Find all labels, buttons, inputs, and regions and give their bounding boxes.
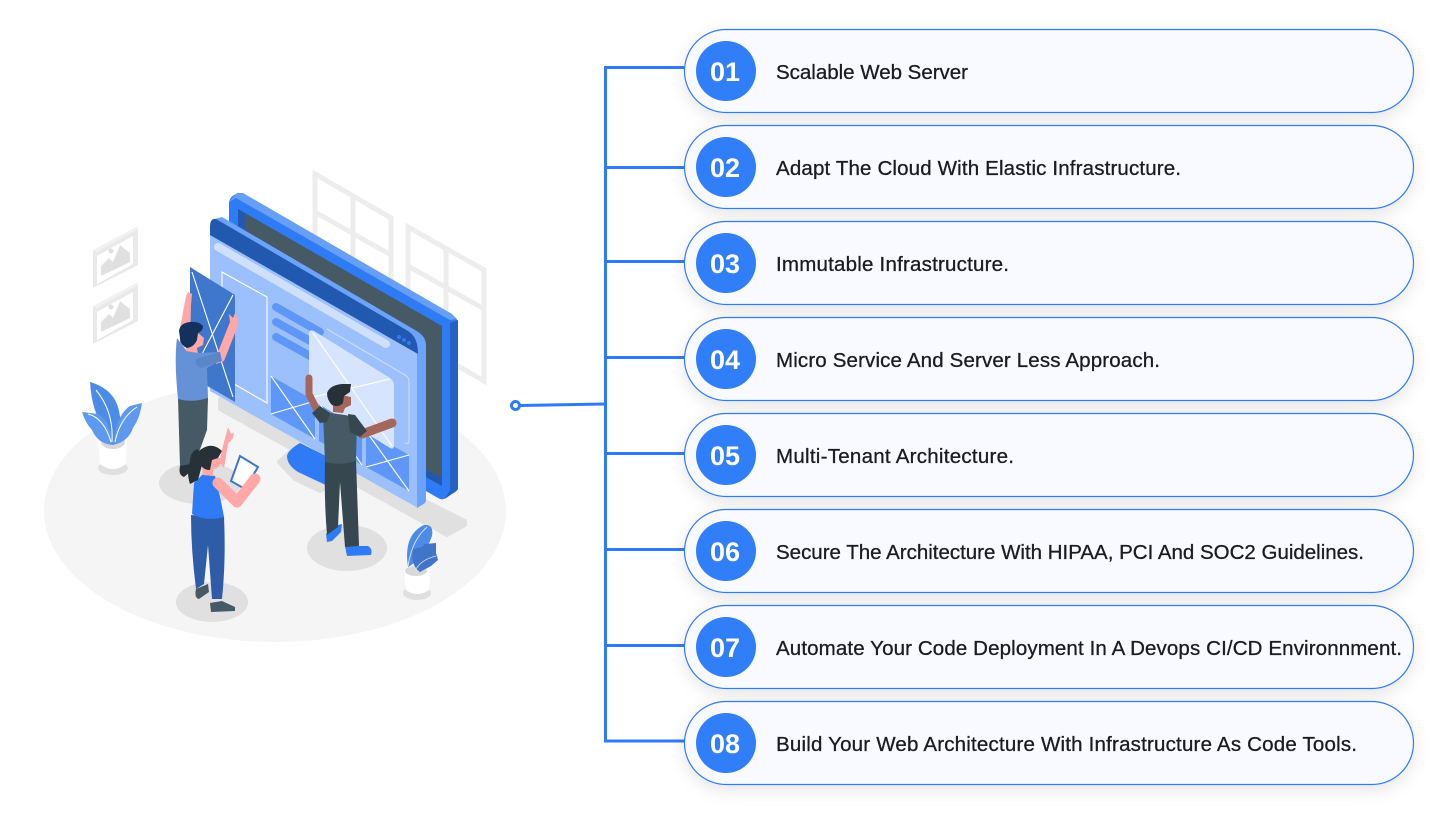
list item 04: 04 (710, 345, 740, 375)
window frame left (315, 174, 391, 325)
translucent card (309, 330, 394, 449)
front monitor screen (210, 217, 426, 508)
arm with clipboard (218, 479, 255, 502)
list item 01: Scalable Web Server (776, 61, 968, 84)
wireframe card (190, 267, 235, 402)
ground ellipse (44, 380, 506, 642)
list lines (276, 307, 320, 357)
monitor stand (287, 443, 330, 487)
list item 03: Immutable Infrastructure. (776, 253, 1009, 276)
window control dots (397, 335, 411, 345)
shoes (195, 584, 209, 599)
list item 08: 08 (710, 729, 740, 759)
plant left (82, 382, 142, 475)
connector lines (512, 68, 684, 741)
list item 06: 06 (710, 537, 740, 567)
hair and ponytail (199, 446, 222, 470)
list item 08 (684, 702, 1414, 784)
wireframe sidebar (222, 272, 267, 403)
pants (325, 460, 359, 547)
list item 03 (684, 222, 1414, 304)
person: woman with clipboard (176, 427, 258, 622)
neck and face (202, 458, 221, 476)
arms (180, 292, 192, 345)
pants (191, 515, 225, 599)
person: man holding wireframe card (159, 267, 241, 504)
connector dot (512, 402, 520, 410)
neck and face (186, 333, 204, 353)
list item 06: Secure The Architecture With HIPAA, PCI And SOC2 Guidelines. (776, 541, 1364, 564)
list item 02: Adapt The Cloud With Elastic Infrastructure. (776, 157, 1181, 180)
person: man reaching across screen (307, 378, 392, 571)
list item 01 (684, 30, 1414, 112)
address bar (218, 247, 386, 344)
image placeholders (271, 376, 409, 491)
list item 02 (684, 126, 1414, 208)
raised arm (219, 427, 234, 468)
plant right (403, 525, 438, 600)
shadow under monitor (220, 399, 465, 535)
list item 04 (684, 318, 1414, 400)
list item 06 (684, 510, 1414, 592)
sleeves (312, 406, 330, 423)
top (192, 474, 224, 519)
icon: picture frame lower (93, 282, 138, 344)
list item 07: Automate Your Code Deployment In A Devops CI/CD Environnment. (776, 637, 1402, 660)
shirt (176, 338, 221, 401)
shoes (326, 524, 342, 542)
back monitor (229, 193, 458, 499)
hair (327, 384, 351, 406)
list item 05 (684, 414, 1414, 496)
list item 05: Multi-Tenant Architecture. (776, 445, 1014, 468)
list item 01: 01 (710, 57, 740, 87)
clipboard (231, 456, 258, 489)
window frame right (408, 227, 484, 381)
pants (178, 398, 208, 468)
icon: picture frame upper (93, 226, 138, 288)
shirt (323, 412, 357, 464)
list item 07 (684, 606, 1414, 688)
neck and face (333, 395, 351, 413)
hair (179, 322, 203, 348)
arms (309, 378, 318, 412)
list item 05: 05 (710, 441, 740, 471)
wireframe outline (327, 329, 409, 444)
illustration: team building a web page on a monitor (44, 174, 506, 642)
connector stem (520, 404, 605, 406)
list item 04: Micro Service And Server Less Approach. (776, 349, 1160, 372)
list item 02: 02 (710, 153, 740, 183)
list item 08: Build Your Web Architecture With Infrastructure As Code Tools. (776, 733, 1357, 756)
list item 07: 07 (710, 633, 740, 663)
stand shadow (279, 452, 340, 491)
list item 03: 03 (710, 249, 740, 279)
